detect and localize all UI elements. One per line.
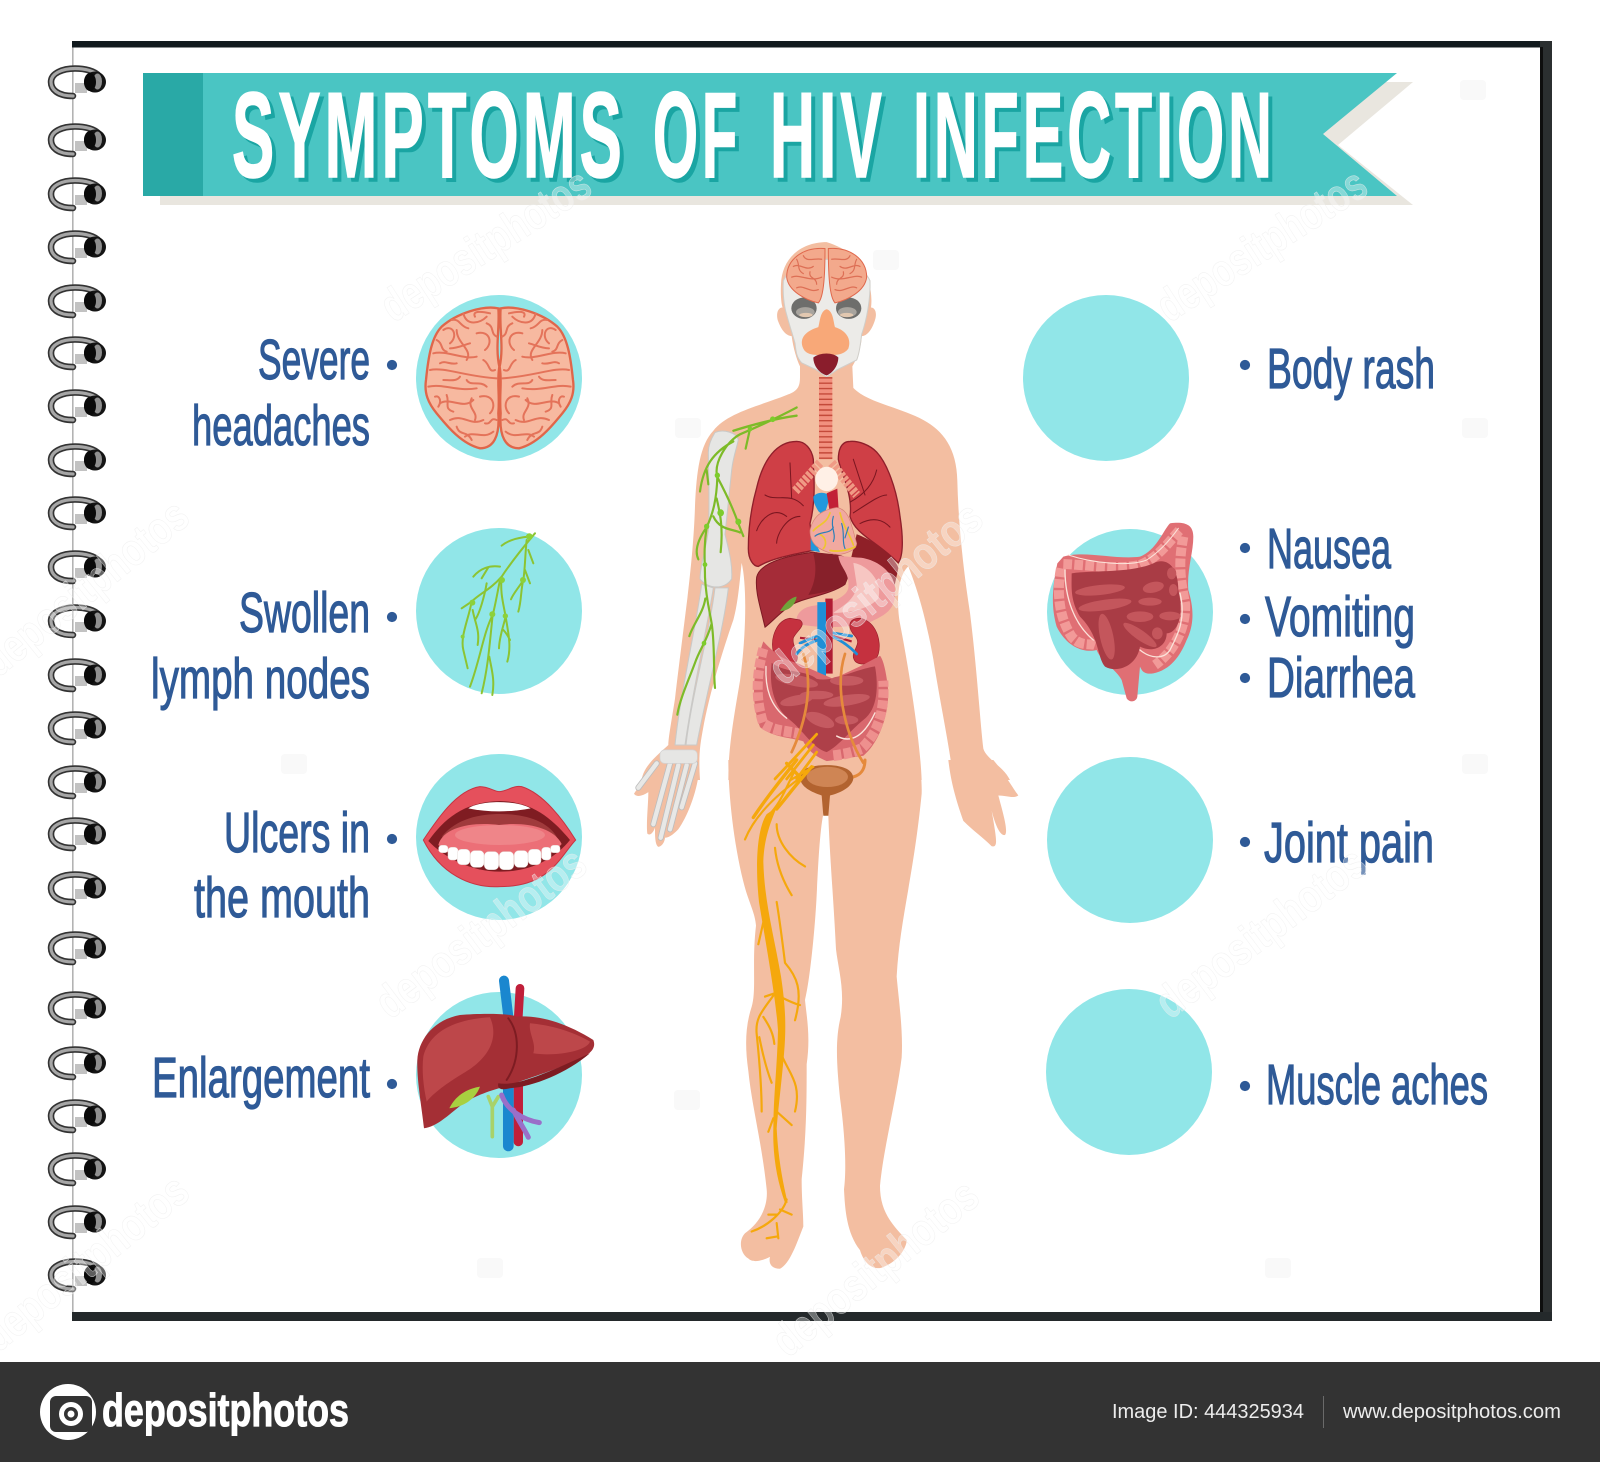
footer divider (1323, 1396, 1324, 1428)
title text: OF (653, 67, 741, 203)
left symptom circles (416, 295, 582, 1158)
watermarks: depositphotos (365, 836, 596, 1028)
kidneys and great vessels (772, 599, 879, 676)
label: severe headaches (192, 328, 396, 458)
left labels (151, 328, 396, 1110)
icon: brain (426, 308, 573, 448)
liver (756, 534, 898, 627)
watermarks: depositphotos (1145, 836, 1376, 1028)
footer bar (0, 1362, 1600, 1462)
icon: liver with vessels (417, 981, 594, 1146)
label: nausea, vomiting, diarrhea (1240, 517, 1415, 710)
watermarks: depositphotos (758, 491, 992, 695)
label: joint pain: Joint pain (1264, 811, 1434, 875)
body upper silhouette (642, 242, 1010, 780)
footer image id: Image ID: 444325934 (1112, 1401, 1304, 1423)
heart (810, 489, 857, 554)
label: ulcers in the mouth (194, 801, 396, 930)
hand bones (638, 750, 697, 838)
label: swollen lymph nodes (151, 581, 396, 711)
right labels (1240, 337, 1488, 1117)
title text: HIV (774, 71, 890, 207)
icon: open mouth (423, 786, 576, 887)
label: body rash (1240, 337, 1435, 401)
watermarks: depositphotos (761, 1169, 988, 1366)
label: swollen lymph nodes: lymph nodes (151, 647, 370, 711)
label: nausea, vomiting, diarrhea: Vomiting (1265, 585, 1415, 649)
footer website: www.depositphotos.com (1342, 1401, 1561, 1423)
faint camera watermarks (281, 80, 1488, 1278)
label: ulcers in the mouth: Ulcers in (224, 801, 370, 865)
bladder (800, 760, 865, 816)
footer logo wordmark: depositphotos (102, 1384, 349, 1436)
label: joint pain (1240, 811, 1434, 875)
label: severe headaches: Severe (258, 328, 370, 392)
title text: HIV (770, 67, 886, 203)
trachea and bronchi (795, 377, 857, 495)
nerve bundle in pelvis (775, 734, 817, 779)
label: swollen lymph nodes: Swollen (239, 581, 370, 645)
body lower silhouette (634, 760, 1018, 1269)
right symptom circles (1023, 295, 1213, 1155)
icon: intestines (1053, 523, 1193, 701)
label: body rash: Body rash (1267, 337, 1435, 401)
title text: OF (657, 71, 745, 207)
title text: SYMPTOMS (232, 67, 626, 203)
label: nausea, vomiting, diarrhea: Nausea (1267, 517, 1391, 581)
label: ulcers in the mouth: the mouth (194, 866, 370, 930)
watermarks: depositphotos (370, 157, 600, 332)
footer logo icon (40, 1384, 96, 1440)
lymph vessels on arm (677, 407, 797, 715)
arm bones (675, 431, 738, 745)
head brain (787, 248, 867, 303)
title text: SYMPTOMS (236, 71, 630, 207)
label: enlargement: Enlargement (152, 1046, 370, 1110)
stomach (796, 556, 895, 627)
label: nausea, vomiting, diarrhea: Diarrhea (1267, 646, 1415, 710)
nasal cavity and throat (802, 309, 849, 375)
skull (783, 259, 870, 377)
human body figure (634, 242, 1018, 1269)
watermarks (0, 157, 1376, 1366)
watermarks: depositphotos (1146, 157, 1376, 332)
lungs (748, 441, 902, 566)
sciatic nerve (745, 760, 813, 1238)
spiral binding rings (51, 68, 106, 1289)
label: muscle aches (1240, 1053, 1488, 1117)
label: severe headaches: headaches (192, 394, 370, 458)
intestines in torso (754, 641, 888, 763)
icon: lymph vessels (461, 533, 535, 695)
title banner (143, 67, 1413, 207)
